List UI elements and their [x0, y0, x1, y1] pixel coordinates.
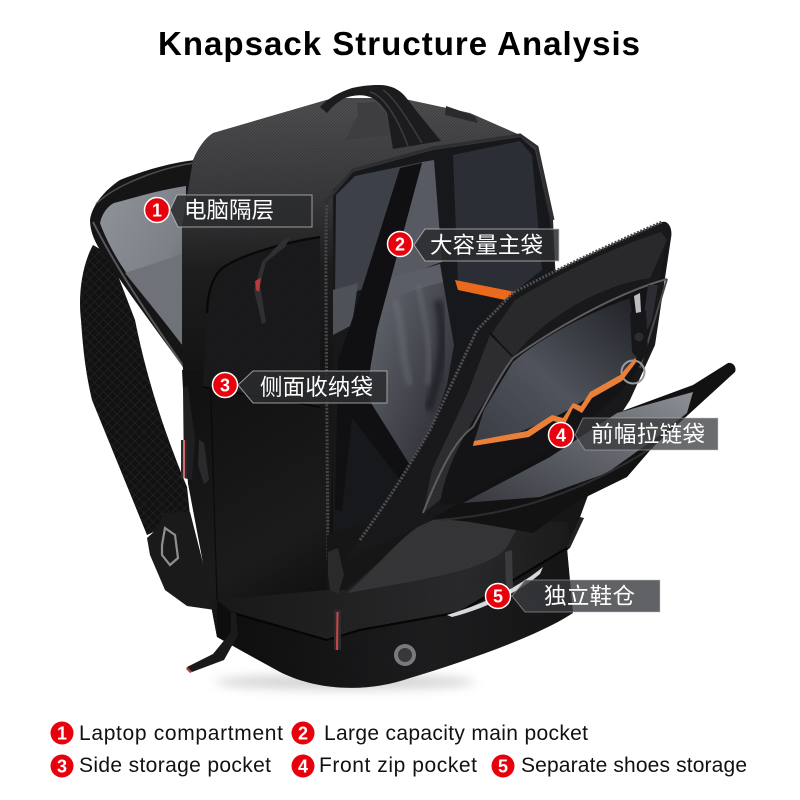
shoe compartment base	[217, 548, 573, 688]
label 1: laptop compartment callout: 1	[152, 200, 162, 220]
label 5: shoes storage callout	[486, 580, 660, 612]
illustration: backpack	[80, 85, 736, 690]
main zipper	[326, 205, 328, 560]
key clip and ring	[622, 293, 648, 384]
front flap inner panel	[423, 240, 668, 513]
legend item 3: Side storage pocket	[79, 754, 271, 777]
carry handle	[320, 85, 441, 149]
label 2: main pocket callout: 2	[395, 234, 405, 254]
legend item 4: Front zip pocket	[319, 754, 477, 777]
top tab	[445, 106, 478, 123]
legend item 4: 4	[298, 756, 308, 776]
orange strip front	[473, 358, 637, 446]
label 3: side pocket callout	[212, 371, 387, 403]
laptop compartment flap	[90, 160, 195, 385]
legend item 1: Laptop compartment	[79, 722, 283, 745]
mesh pouch	[364, 264, 454, 480]
zippers and pulls on the side	[181, 386, 209, 484]
legend item 5: Separate shoes storage	[521, 754, 747, 777]
label 1: laptop compartment callout	[144, 195, 312, 227]
zipper pulls bottom	[186, 517, 584, 673]
side strap and buckle	[147, 512, 215, 610]
label 5: shoes storage callout: 独立鞋仓	[544, 584, 635, 609]
legend item 1: 1	[57, 724, 67, 744]
label 1: laptop compartment callout: 电脑隔层	[184, 198, 274, 223]
vent grommet	[394, 644, 416, 666]
label 4: front zip pocket callout: 前幅拉链袋	[591, 422, 705, 447]
label 2: main pocket callout: 大容量主袋	[430, 233, 543, 258]
label 5: shoes storage callout: 5	[493, 586, 503, 606]
legend item 2: 2	[298, 724, 308, 744]
shoulder strap	[80, 245, 190, 535]
side pocket	[203, 236, 320, 407]
label 2: main pocket callout	[388, 229, 559, 261]
backing fill under the flap	[327, 490, 590, 605]
mid section above shoe zipper	[217, 510, 570, 640]
title: Knapsack Structure Analysis	[158, 25, 640, 62]
front flap	[345, 222, 671, 560]
main compartment interior	[333, 137, 555, 545]
legend item 5: 5	[498, 756, 508, 776]
lower front flap pocket	[433, 363, 736, 533]
legend	[50, 722, 747, 778]
ground shadow	[215, 674, 475, 690]
orange strip main	[455, 280, 515, 300]
label 3: side pocket callout: 侧面收纳袋	[260, 375, 373, 400]
label 4: front zip pocket callout: 4	[556, 426, 566, 446]
legend item 2: Large capacity main pocket	[324, 722, 588, 745]
main body	[182, 98, 556, 637]
legend item 3: 3	[57, 756, 67, 776]
label 4: front zip pocket callout	[548, 418, 718, 450]
inner black strap	[335, 163, 422, 510]
label 3: side pocket callout: 3	[220, 376, 230, 396]
